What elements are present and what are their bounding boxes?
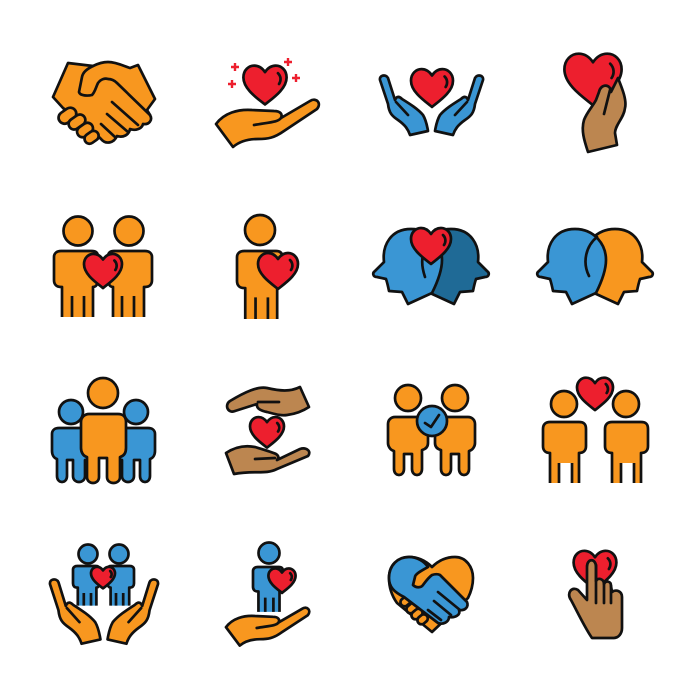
orange head xyxy=(584,229,653,304)
blue head xyxy=(373,229,442,304)
left blue person xyxy=(52,400,90,482)
heart xyxy=(411,69,453,107)
icon: finger heart hand xyxy=(569,551,622,638)
icon: handshake xyxy=(53,62,155,146)
heart xyxy=(574,551,616,589)
icon: two people held in hands xyxy=(50,544,158,644)
hand xyxy=(583,78,625,152)
heart xyxy=(564,54,622,105)
heart xyxy=(258,253,298,289)
heart xyxy=(84,254,122,288)
heart xyxy=(577,378,613,410)
left hand xyxy=(50,579,100,644)
icon: two overlapping heads xyxy=(537,229,653,304)
right person xyxy=(108,544,134,606)
icon: person with heart on open hand xyxy=(226,542,309,646)
icon: two people with heart xyxy=(54,216,152,317)
icon: heart between brown hands xyxy=(226,387,309,474)
icon: heart over open hand with sparkles xyxy=(216,58,319,147)
heart xyxy=(411,228,451,264)
finger: knuckles xyxy=(56,105,101,146)
right blue person xyxy=(117,400,155,482)
left hand xyxy=(380,76,428,135)
left person xyxy=(73,544,99,606)
left person xyxy=(543,391,586,483)
icon: heart between blue hands xyxy=(380,69,483,135)
fingers xyxy=(399,593,429,626)
right hand xyxy=(108,579,158,644)
icon: person with heart xyxy=(237,215,298,319)
hand xyxy=(569,560,622,638)
bottom hand xyxy=(226,446,309,474)
top hand xyxy=(227,387,309,415)
icon: two heads with heart xyxy=(373,228,489,304)
left person xyxy=(388,385,428,475)
icon: two people with check badge xyxy=(388,385,475,475)
icon: heart shaped handshake xyxy=(389,557,473,632)
dark head xyxy=(420,229,489,304)
heart xyxy=(91,567,115,588)
sparkles xyxy=(228,58,300,88)
center orange person xyxy=(81,378,126,483)
right person xyxy=(435,385,475,475)
blue hand xyxy=(389,557,468,624)
heart xyxy=(243,66,287,105)
hand xyxy=(226,608,309,646)
hand xyxy=(216,100,319,147)
left person xyxy=(54,216,98,317)
icon: two people with heart above xyxy=(543,378,648,483)
right person xyxy=(605,391,648,483)
hand lines xyxy=(428,592,460,620)
heart xyxy=(250,417,284,448)
heart xyxy=(268,568,296,593)
orange heart xyxy=(389,557,473,632)
blue head xyxy=(537,229,606,304)
icon: hand holding heart xyxy=(564,54,625,152)
right person xyxy=(108,216,152,317)
check badge xyxy=(417,406,447,436)
icon: group of three people xyxy=(52,378,155,483)
right hand xyxy=(435,76,483,135)
